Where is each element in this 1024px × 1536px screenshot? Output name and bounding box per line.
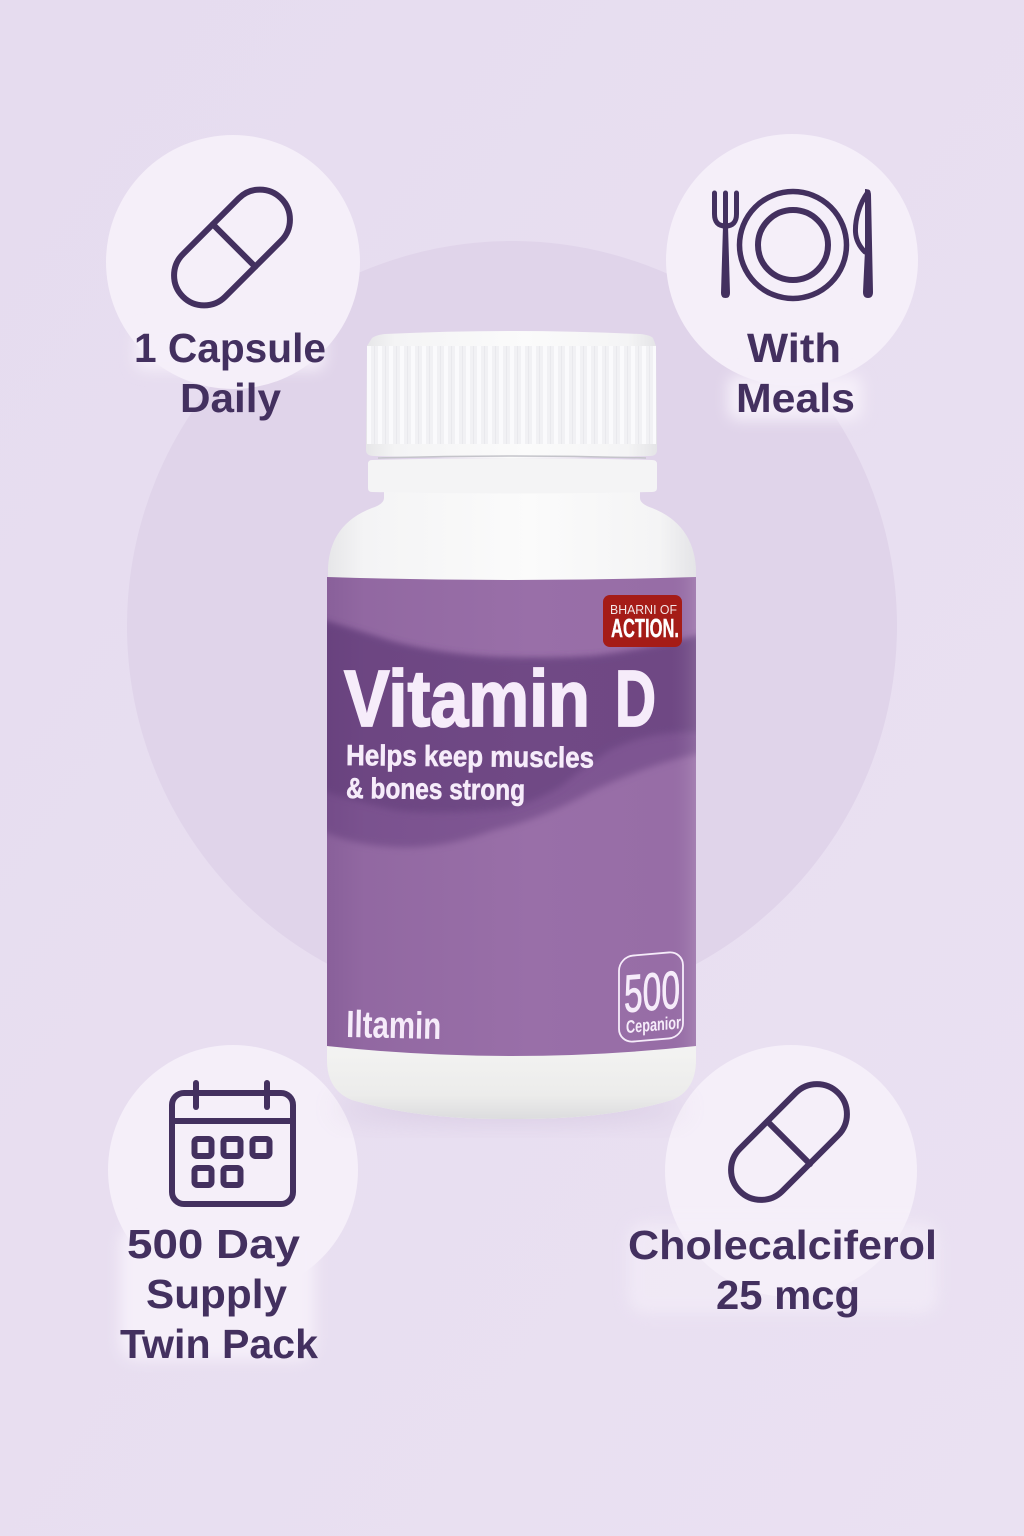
badge background xyxy=(603,595,682,647)
label: With Meals xyxy=(736,325,855,421)
cap ribs xyxy=(367,346,656,444)
label edge shading xyxy=(327,577,696,1067)
product subtitle: & bones strong xyxy=(346,773,525,807)
count outline xyxy=(619,951,683,1043)
panel: cholecalciferol 25 mcg xyxy=(628,1045,938,1318)
label: 500 Day Supply Twin Pack: Supply xyxy=(146,1271,287,1317)
label: With Meals: With xyxy=(747,325,841,371)
bottle base xyxy=(327,1040,696,1119)
bottle shoulder and body xyxy=(327,490,696,1119)
icon: capsule xyxy=(162,177,302,318)
text halo xyxy=(120,1225,315,1360)
large background circle xyxy=(127,241,897,1011)
icon: capsule xyxy=(719,1072,859,1212)
label: 500 Day Supply Twin Pack xyxy=(120,1221,318,1367)
panel: 1 capsule daily xyxy=(106,135,360,421)
label: 1 Capsule Daily xyxy=(134,325,326,421)
label: With Meals: Meals xyxy=(736,375,855,421)
text halo xyxy=(728,375,862,420)
circle: capsule badge xyxy=(106,135,360,389)
count unit: Cepanior xyxy=(626,1012,681,1037)
label: Cholecalciferol 25 mcg xyxy=(628,1222,937,1318)
label: Cholecalciferol 25 mcg: Cholecalciferol xyxy=(628,1222,937,1268)
label: 500 Day Supply Twin Pack: Twin Pack xyxy=(120,1321,318,1367)
cap rib stripes xyxy=(367,346,656,444)
text halo xyxy=(628,1222,938,1314)
product title: D xyxy=(615,654,656,743)
product subtitle: Helps keep muscles xyxy=(346,740,594,775)
circle: ingredient badge xyxy=(665,1045,917,1297)
count badge xyxy=(619,951,683,1043)
product subtitle xyxy=(346,740,594,807)
icon: fork, plate and knife xyxy=(714,189,873,298)
cap band xyxy=(368,458,657,494)
circle: meals badge xyxy=(666,134,918,386)
label lower wave xyxy=(327,730,696,849)
label: Cholecalciferol 25 mcg: 25 mcg xyxy=(716,1272,860,1318)
cap gap xyxy=(378,456,646,458)
badge text: BHARNI OF xyxy=(610,602,677,617)
text halo xyxy=(135,330,325,370)
badge action text: ACTION. xyxy=(611,613,679,643)
label dark wave xyxy=(320,620,703,812)
circle: calendar badge xyxy=(108,1045,358,1295)
badge: Bharni of Action xyxy=(603,595,682,647)
count number: 500 xyxy=(624,961,680,1024)
label: 1 Capsule Daily: Daily xyxy=(180,375,281,421)
panel: with meals xyxy=(666,134,918,421)
label background xyxy=(327,577,696,1067)
label xyxy=(320,577,703,1067)
label: 1 Capsule Daily: 1 Capsule xyxy=(134,325,326,371)
bottle ground shadow xyxy=(335,1098,685,1118)
panel: 500 day supply twin pack xyxy=(108,1045,358,1367)
bottle xyxy=(320,331,703,1119)
cap xyxy=(366,331,657,458)
icon: calendar xyxy=(172,1083,293,1204)
product title: Vitamin xyxy=(344,654,590,743)
brand wordmark: Iltamin xyxy=(346,1004,442,1048)
label: 500 Day Supply Twin Pack: 500 Day xyxy=(127,1221,300,1267)
